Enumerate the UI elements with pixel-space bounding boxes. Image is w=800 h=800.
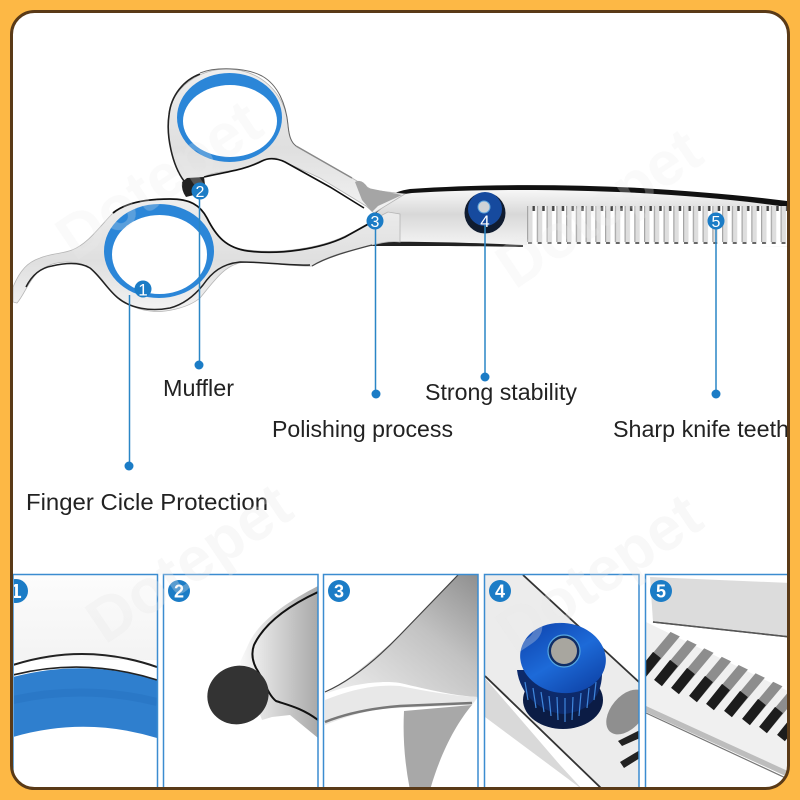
badge 3 [328,580,350,602]
label: Polishing process: Polishing process [272,416,453,442]
panel 2: muffler detail [164,574,318,790]
tooth slots, grey upper parts [641,632,800,738]
badge 2 [168,580,190,602]
number badge 2 [192,182,208,201]
upper watermarks: Dotepet [44,87,274,274]
label: Finger Cicle Protection: Finger Cicle Protection [26,489,268,515]
panel 5: teeth detail [644,574,787,787]
upper watermarks: Dotepet [484,115,714,302]
lower blue finger ring [104,204,214,298]
blue knob [517,622,606,729]
label: Strong stability: Strong stability [425,379,577,405]
callout lines [130,195,716,466]
badge 5: 5 [656,582,666,602]
number badge 3: 3 [371,214,380,231]
number badge 2: 2 [196,184,205,201]
number badge 1 [134,280,152,300]
scissors illustration [13,69,787,311]
badge 3: 3 [334,582,344,602]
pivot knob [464,192,506,234]
upper handle [168,69,405,213]
thinning teeth [527,206,787,246]
rubber bumper [207,666,269,724]
panel 3: polishing detail [324,574,478,790]
badge 2: 2 [174,582,184,602]
label: Sharp knife teeth: Sharp knife teeth [613,416,789,442]
panel 4: screw knob detail [484,574,656,790]
number badge 5: 5 [712,214,721,231]
muffler bumper [182,177,206,197]
top blade [360,185,787,247]
lower watermarks: Dotepet [484,480,714,667]
callout end dots [124,360,720,470]
badge 5 [650,580,672,602]
lower handle [13,199,400,311]
number badge 3 [366,212,384,231]
lower watermarks [74,470,714,667]
number badge 4: 4 [480,212,490,231]
badge 1: 1 [10,581,22,603]
label: Muffler: Muffler [163,375,234,401]
number badge 5 [708,212,724,231]
upper blue finger ring [177,73,282,162]
badge 1 [14,579,28,603]
detail panels [4,574,800,790]
lower watermarks: Dotepet [74,470,304,657]
gap above teeth tips [656,623,786,686]
number badge 1: 1 [138,280,148,300]
upper watermarks [44,87,714,302]
panel 1: finger ring detail [4,574,158,790]
badge 4 [489,580,511,602]
badge 4: 4 [495,582,505,602]
tooth slots, dark lower parts [641,655,797,738]
